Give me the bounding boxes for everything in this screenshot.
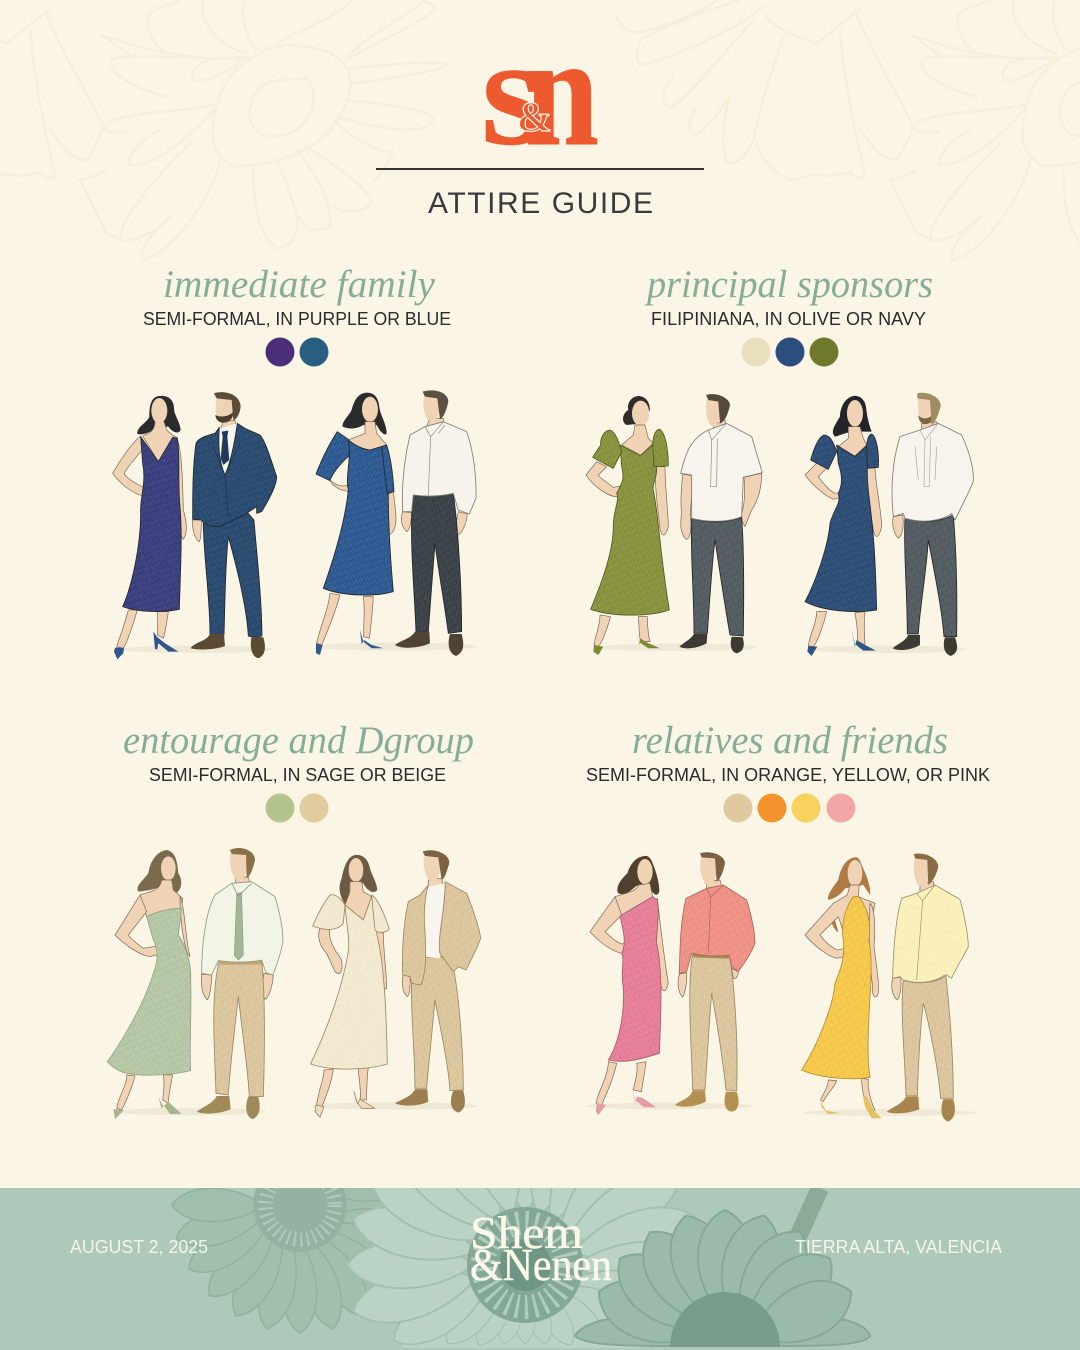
figure: woman in olive terno dress [586, 396, 669, 655]
heading: relatives and friends [632, 719, 948, 762]
S&N monogram logo: S [481, 46, 544, 166]
S&N monogram logo: & [517, 95, 552, 141]
heading: principal sponsors [644, 263, 933, 306]
subheading: FILIPINIANA, IN OLIVE OR NAVY [651, 309, 926, 329]
figure: woman in pink one-shoulder dress [590, 856, 668, 1115]
figure: man in pale yellow shirt and tan trousers [887, 854, 968, 1122]
footer daisy photograph [171, 1188, 871, 1348]
panel: principal sponsors [586, 263, 973, 656]
venue: TIERRA ALTA, VALENCIA [795, 1237, 1002, 1257]
figure: woman in sage strapless dress [107, 850, 191, 1119]
panel: relatives and friends [586, 719, 990, 1122]
heading: immediate family [163, 263, 436, 306]
figure: man in short-sleeve barong and gray trousers [679, 394, 762, 653]
figure: woman in blue sweetheart dress [316, 393, 396, 655]
title: ATTIRE GUIDE [428, 187, 653, 220]
figure: woman in purple V-neck dress [113, 396, 186, 659]
S&N monogram logo: n [525, 3, 599, 179]
footer band [0, 1188, 1080, 1350]
colour swatches [742, 338, 838, 366]
S&N monogram logo [481, 3, 599, 179]
figure: man in long-sleeve barong with beard [892, 393, 973, 656]
figure: man in pale shirt, sage tie and tan trousers [197, 848, 283, 1119]
faint daisy outlines background [0, 0, 1080, 260]
figure: man in tan suit [395, 850, 481, 1113]
header rule [376, 168, 704, 170]
illustration: two couples in pink, coral and yellow [587, 852, 977, 1122]
couple names wordmark: Shem [470, 1207, 583, 1258]
figure: man in navy suit [191, 392, 277, 658]
colour swatches [724, 794, 856, 822]
couple names wordmark [470, 1207, 612, 1290]
figure: woman in yellow halter dress [802, 857, 882, 1118]
illustration: two couples in purple and blue [113, 390, 477, 659]
figure: man in white shirt and charcoal trousers [395, 390, 476, 656]
couple names wordmark: &Nenen [470, 1239, 612, 1290]
subheading: SEMI-FORMAL, IN SAGE OR BEIGE [149, 765, 446, 785]
heading: entourage and Dgroup [123, 719, 474, 762]
colour swatches [266, 794, 328, 822]
subheading: SEMI-FORMAL, IN PURPLE OR BLUE [143, 309, 451, 329]
figure: man in coral shirt and tan trousers [675, 852, 755, 1112]
figure: woman in cream flutter-sleeve dress [311, 855, 389, 1117]
panel: entourage and Dgroup [107, 719, 481, 1119]
illustration: two couples in olive and navy filipiniana [586, 393, 973, 656]
date: AUGUST 2, 2025 [70, 1237, 208, 1257]
panel: immediate family [113, 263, 477, 659]
illustration: two couples in sage and beige [107, 848, 481, 1119]
figure: woman in navy terno dress [805, 396, 882, 656]
colour swatches [266, 338, 328, 366]
subheading: SEMI-FORMAL, IN ORANGE, YELLOW, OR PINK [586, 765, 990, 785]
